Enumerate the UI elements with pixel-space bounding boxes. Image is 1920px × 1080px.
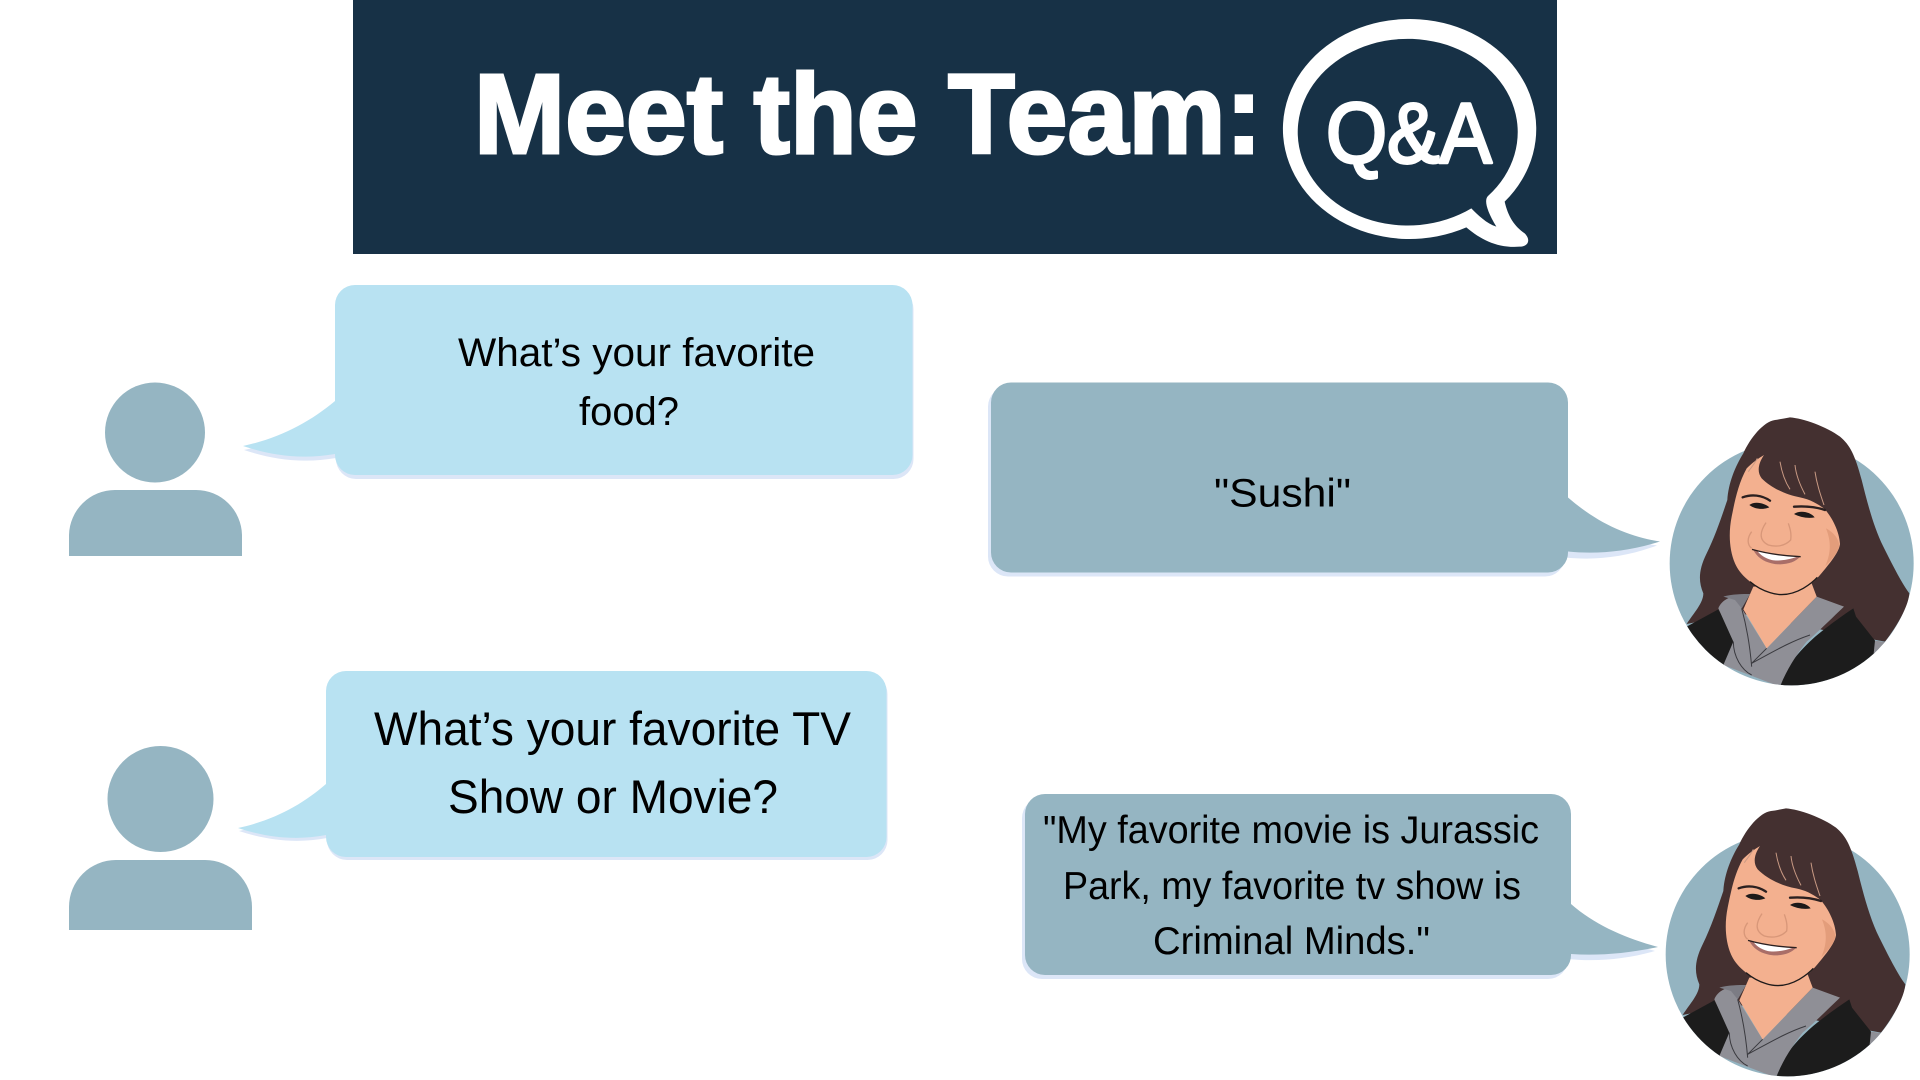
icon: person 2 [69, 746, 252, 930]
question bubble: favorite food [243, 285, 914, 479]
icon: Q&A speech bubble [1283, 19, 1536, 247]
question text [374, 702, 852, 823]
question text: food? [579, 390, 679, 434]
answer text: Criminal Minds." [1153, 920, 1430, 963]
answer text: "My favorite movie is Jurassic [1043, 809, 1539, 852]
question text: Show or Movie? [448, 770, 778, 823]
avatar: team member portrait [1670, 417, 1914, 690]
answer text: Park, my favorite tv show is [1063, 865, 1521, 908]
question text: What’s your favorite TV [374, 702, 852, 755]
answer text [1043, 809, 1539, 963]
answer bubble: Sushi [988, 382, 1660, 576]
question bubble: favorite TV show or movie [238, 671, 888, 860]
answer bubble: Jurassic Park and Criminal Minds [1022, 794, 1658, 979]
avatar: team member portrait repeated [1666, 808, 1910, 1080]
title: Meet the Team: [474, 51, 1262, 177]
icon: person 1 [69, 382, 242, 556]
answer text: "Sushi" [1214, 472, 1351, 516]
question text [458, 331, 815, 434]
question text: What’s your favorite [458, 331, 815, 375]
icon: Q&A speech bubble: Q&A [1326, 87, 1492, 182]
title banner [353, 0, 1557, 254]
